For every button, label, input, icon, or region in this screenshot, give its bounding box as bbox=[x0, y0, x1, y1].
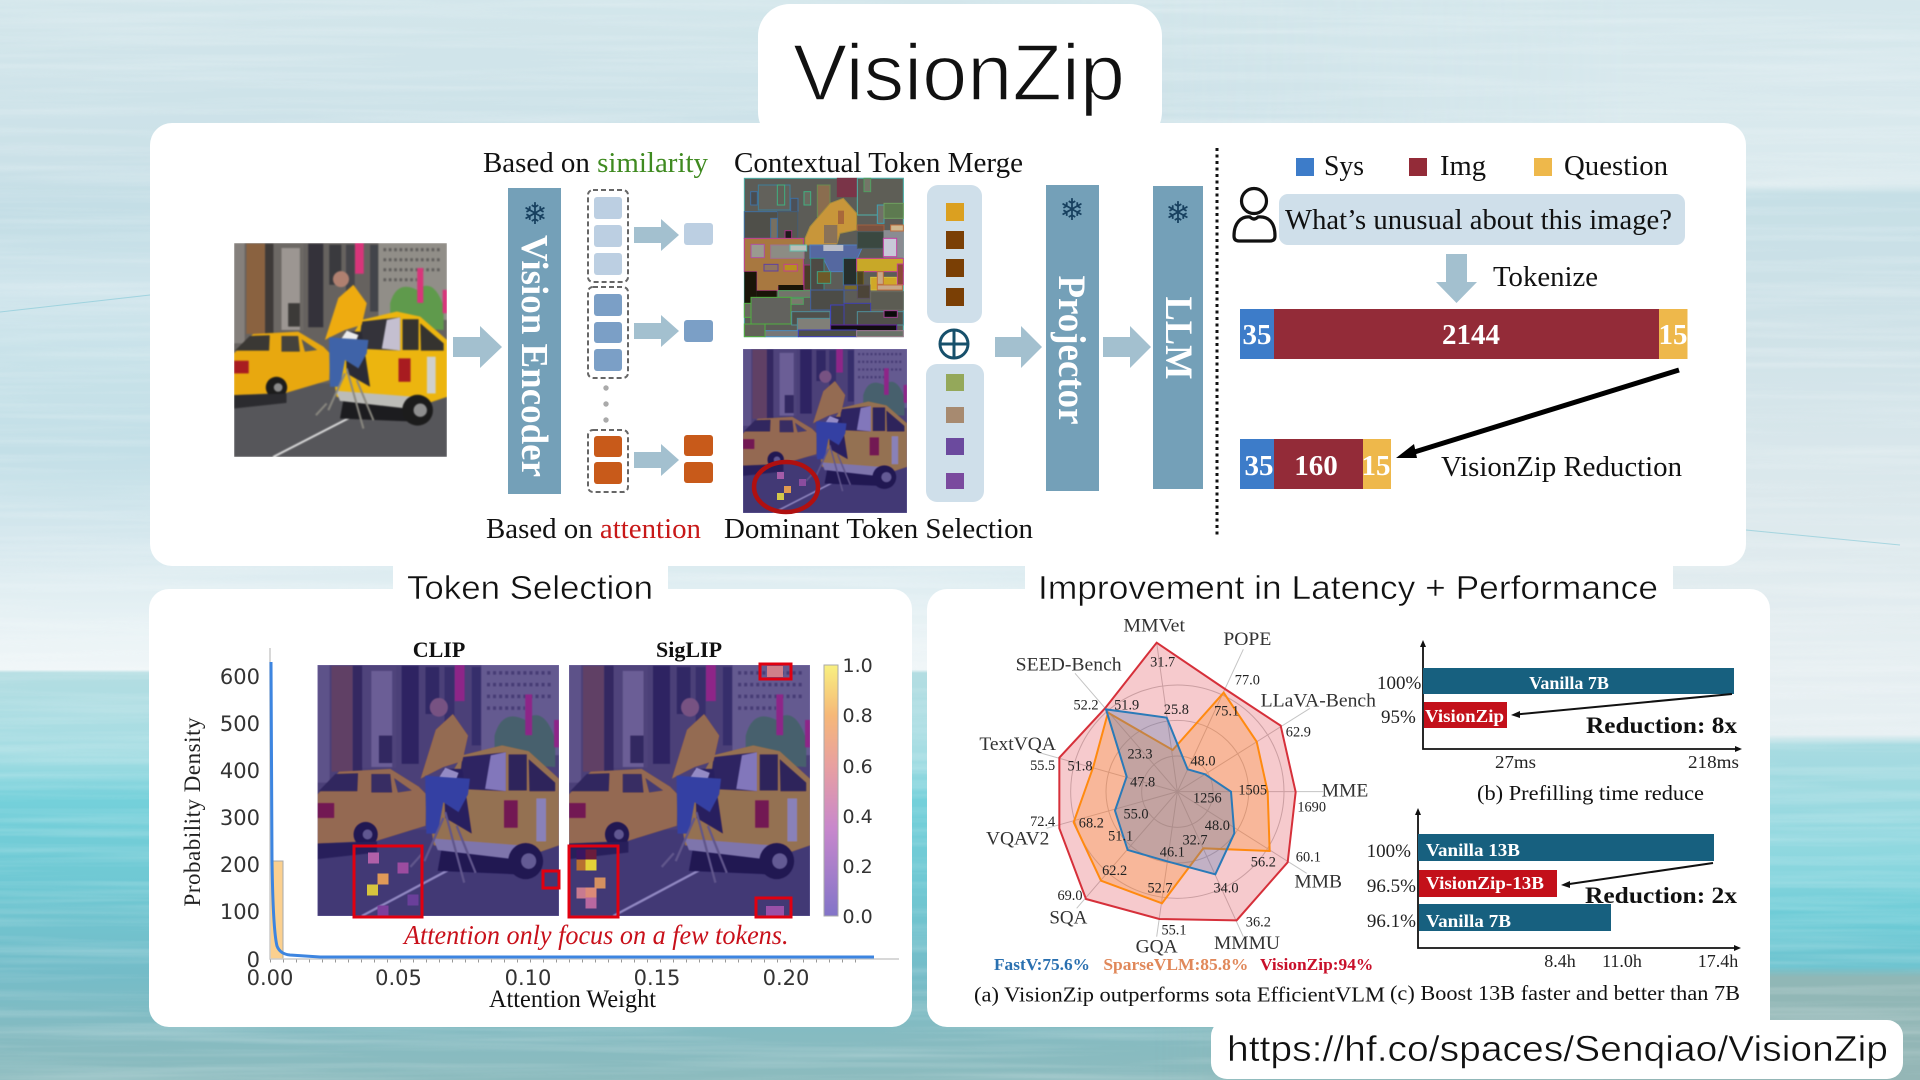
x axis ticks: 0.00 bbox=[247, 966, 293, 990]
radar series: FastV bbox=[1106, 709, 1234, 874]
colorbar: 0.0 bbox=[842, 906, 873, 928]
input photo: taxi and ironing man bbox=[234, 243, 447, 457]
x axis ticks: 0.10 bbox=[505, 966, 551, 990]
bar: vanilla 7B: Vanilla 7B bbox=[1529, 673, 1609, 693]
y labels c: 100% bbox=[1367, 841, 1411, 862]
bar: original token counts: 35 bbox=[1242, 319, 1272, 351]
panel: attention chart bbox=[180, 637, 899, 1013]
bar: reduced token counts: 35 bbox=[1244, 450, 1274, 482]
bar: vanilla 7B bbox=[1423, 668, 1734, 694]
arrow: projector to LLM bbox=[1103, 326, 1151, 368]
vision encoder block: Vision Encoder bbox=[513, 235, 555, 477]
label: SigLIP: SigLIP bbox=[656, 637, 722, 662]
colorbar: 1.0 bbox=[842, 655, 873, 677]
label: dominant token selection: Dominant Token Selection bbox=[724, 513, 1033, 545]
x axis ticks bbox=[247, 966, 809, 990]
bar: vanilla 7B lower bbox=[1419, 904, 1611, 931]
projector block bbox=[1046, 185, 1099, 491]
label: tokenize: Tokenize bbox=[1493, 262, 1598, 293]
radar legend: FastV:75.6% bbox=[994, 955, 1090, 974]
radar value labels: 62.2 bbox=[1102, 863, 1127, 879]
radar category labels: MMB bbox=[1294, 871, 1342, 892]
merged tokens bbox=[684, 223, 713, 483]
LLM block: LLM bbox=[1157, 296, 1200, 380]
radar value labels: 56.2 bbox=[1251, 855, 1276, 871]
y labels c: 96.5% bbox=[1367, 876, 1416, 897]
arrows: tokens to merged tokens bbox=[634, 219, 679, 476]
caption b: (b) Prefilling time reduce bbox=[1477, 781, 1704, 805]
radar value labels: 75.1 bbox=[1214, 704, 1239, 720]
radar category labels: GQA bbox=[1136, 936, 1178, 957]
x labels b bbox=[1495, 752, 1739, 772]
bar: reduced token counts bbox=[1240, 439, 1391, 489]
radar value labels: 47.8 bbox=[1130, 775, 1155, 791]
x labels c: 11.0h bbox=[1602, 951, 1642, 971]
label: based on similarity: Based on similarity bbox=[483, 147, 708, 179]
radar legend: VisionZip:94% bbox=[1260, 955, 1373, 974]
x axis ticks: 0.20 bbox=[763, 966, 809, 990]
y axis ticks: 400 bbox=[220, 759, 260, 783]
radar value labels: 55.5 bbox=[1030, 758, 1055, 774]
radar value labels bbox=[1030, 655, 1326, 938]
axis arrowheads b bbox=[1420, 640, 1742, 752]
x axis title: Attention Weight bbox=[489, 986, 656, 1013]
radar chart bbox=[974, 616, 1385, 1007]
colorbar: 0.2 bbox=[842, 856, 873, 878]
bar: original token counts: 2144 bbox=[1442, 319, 1500, 351]
axes b bbox=[1423, 644, 1738, 749]
icon: concatenate circle plus bbox=[940, 330, 968, 358]
x labels c: 8.4h bbox=[1544, 951, 1576, 971]
bar: vanilla 7B lower: Vanilla 7B bbox=[1426, 911, 1511, 931]
x labels b: 218ms bbox=[1688, 752, 1739, 772]
y axis ticks: 0 bbox=[247, 948, 260, 972]
panel: pipeline diagram bbox=[234, 147, 1203, 545]
superpixel merge image bbox=[744, 178, 903, 337]
bar: vanilla 13B bbox=[1418, 834, 1714, 861]
radar legend bbox=[994, 955, 1373, 974]
radar value labels: 1690 bbox=[1297, 800, 1326, 816]
radar value labels: 60.1 bbox=[1296, 850, 1321, 866]
radar value labels: 1256 bbox=[1193, 790, 1222, 806]
icon: user bbox=[1234, 188, 1275, 241]
arrow: tokenize down bbox=[1436, 254, 1477, 303]
radar value labels: 36.2 bbox=[1246, 915, 1271, 931]
legend: sys img question: Img bbox=[1440, 151, 1486, 182]
x labels c bbox=[1544, 951, 1738, 971]
heading: improvement: Improvement in Latency + Performance bbox=[1038, 569, 1658, 606]
callout: reduction 8x: Reduction: 8x bbox=[1586, 713, 1738, 738]
token groups by similarity and attention bbox=[588, 190, 628, 492]
radar series: VisionZip bbox=[1059, 643, 1296, 920]
chart c: training time bbox=[1367, 808, 1741, 1005]
radar category labels: SQA bbox=[1049, 907, 1087, 928]
radar category labels: MMMU bbox=[1214, 933, 1280, 954]
radar value labels: 62.9 bbox=[1286, 725, 1311, 741]
y labels b: 100% bbox=[1377, 673, 1422, 694]
vision encoder block bbox=[508, 188, 561, 494]
caption a: (a) VisionZip outperforms sota EfficientVLM bbox=[974, 983, 1385, 1007]
token pill: contextual bbox=[927, 185, 982, 323]
radar value labels: 51.8 bbox=[1067, 759, 1093, 775]
radar value labels: 51.1 bbox=[1108, 829, 1133, 845]
y axis title: Probability Density bbox=[180, 717, 205, 906]
radar value labels: 52.2 bbox=[1073, 697, 1099, 713]
bar: original token counts: 15 bbox=[1658, 319, 1688, 351]
arrow: tokens to projector bbox=[995, 326, 1042, 368]
bar: VisionZip: VisionZip bbox=[1425, 706, 1504, 726]
radar legend: SparseVLM:85.8% bbox=[1103, 955, 1248, 974]
LLM block bbox=[1153, 186, 1203, 489]
legend: sys img question bbox=[1296, 151, 1668, 182]
histogram bar bbox=[270, 861, 283, 959]
arrow: reduction bbox=[1396, 370, 1679, 458]
y labels c: 96.1% bbox=[1367, 911, 1416, 932]
radar value labels: 48.0 bbox=[1205, 818, 1230, 834]
radar value labels: 55.1 bbox=[1161, 922, 1187, 938]
radar grid bbox=[1038, 643, 1323, 937]
legend: sys img question: Question bbox=[1564, 151, 1668, 182]
label: visionzip reduction: VisionZip Reduction bbox=[1441, 452, 1682, 483]
y labels b: 95% bbox=[1381, 707, 1416, 728]
callout: attention note: Attention only focus on a few tokens. bbox=[402, 920, 788, 950]
y labels b bbox=[1377, 673, 1422, 728]
radar value labels: 25.8 bbox=[1164, 702, 1189, 718]
heatmap: CLIP bbox=[318, 665, 559, 917]
heatmap: SigLIP bbox=[569, 664, 810, 917]
radar value labels: 68.2 bbox=[1079, 815, 1104, 831]
bar: reduced token counts: 160 bbox=[1294, 450, 1338, 482]
radar category labels: POPE bbox=[1223, 629, 1271, 650]
radar category labels: LLaVA-Bench bbox=[1261, 691, 1376, 712]
radar value labels: 48.0 bbox=[1190, 754, 1216, 770]
projector block: ❄ bbox=[1059, 193, 1085, 228]
radar category labels: VQAV2 bbox=[986, 828, 1049, 849]
radar value labels: 1505 bbox=[1238, 782, 1267, 798]
panel: token reduction bbox=[1234, 151, 1688, 489]
radar category labels: MME bbox=[1322, 781, 1368, 802]
chart b: prefilling time bbox=[1377, 640, 1742, 805]
caption c: (c) Boost 13B faster and better than 7B bbox=[1390, 981, 1740, 1005]
radar value labels: 23.3 bbox=[1127, 746, 1153, 762]
callout: reduction 2x: Reduction: 2x bbox=[1585, 883, 1738, 908]
radar series: SparseVLM bbox=[1074, 693, 1270, 903]
radar value labels: 34.0 bbox=[1213, 881, 1239, 897]
colorbar: 0.4 bbox=[842, 806, 873, 828]
y axis ticks: 300 bbox=[220, 806, 260, 830]
URL badge: https://hf.co/spaces/Senqiao/VisionZip bbox=[1227, 1028, 1888, 1069]
y axis ticks: 100 bbox=[220, 900, 260, 924]
y axis ticks: 200 bbox=[220, 853, 260, 877]
x labels c: 17.4h bbox=[1698, 951, 1738, 971]
axis arrowheads c bbox=[1415, 808, 1741, 951]
heading: token selection: Token Selection bbox=[407, 569, 653, 606]
title: VisionZip bbox=[793, 28, 1125, 117]
bar: VisionZip-13B bbox=[1419, 870, 1557, 897]
radar value labels: 46.1 bbox=[1160, 845, 1185, 861]
bar: VisionZip-13B: VisionZip-13B bbox=[1426, 873, 1544, 893]
y axis ticks: 500 bbox=[220, 712, 260, 736]
arrow c bbox=[1561, 863, 1713, 888]
radar category labels bbox=[979, 616, 1376, 957]
colorbar: 0.8 bbox=[842, 705, 873, 727]
y axis ticks bbox=[220, 665, 260, 972]
chart axes bbox=[270, 648, 899, 961]
arrow: image to encoder bbox=[453, 326, 502, 368]
radar value labels: 51.9 bbox=[1114, 697, 1139, 713]
radar value labels: 69.0 bbox=[1057, 888, 1083, 904]
radar category labels: TextVQA bbox=[979, 734, 1056, 755]
radar category labels: SEED-Bench bbox=[1016, 655, 1122, 676]
y axis ticks: 600 bbox=[220, 665, 260, 689]
URL badge bbox=[1211, 1020, 1903, 1079]
radar value labels: 31.7 bbox=[1150, 655, 1175, 671]
x axis ticks: 0.05 bbox=[375, 966, 422, 990]
radar value labels: 72.4 bbox=[1030, 814, 1055, 830]
radar value labels: 32.7 bbox=[1182, 832, 1208, 848]
vision encoder block: ❄ bbox=[522, 197, 548, 232]
radar value labels: 77.0 bbox=[1235, 672, 1260, 688]
bar: reduced token counts: 15 bbox=[1362, 450, 1390, 482]
density curve bbox=[271, 662, 874, 957]
LLM block: ❄ bbox=[1165, 196, 1191, 231]
projector block: Projector bbox=[1050, 276, 1093, 424]
radar category labels: MMVet bbox=[1123, 616, 1186, 637]
label: CLIP: CLIP bbox=[413, 637, 465, 662]
bar: original token counts bbox=[1240, 309, 1688, 359]
bar: VisionZip bbox=[1424, 702, 1507, 728]
label: contextual token merge: Contextual Token Merge bbox=[734, 147, 1023, 179]
question bubble bbox=[1279, 194, 1685, 245]
colorbar: 0.6 bbox=[842, 756, 873, 778]
x labels b: 27ms bbox=[1495, 752, 1536, 772]
y labels c bbox=[1367, 841, 1416, 932]
attention overlay image bbox=[743, 349, 907, 513]
label: based on attention: Based on attention bbox=[486, 513, 701, 545]
bar: vanilla 13B: Vanilla 13B bbox=[1426, 840, 1520, 860]
colorbar bbox=[824, 655, 873, 928]
legend: sys img question: Sys bbox=[1324, 151, 1364, 182]
arrow b bbox=[1511, 694, 1732, 718]
x axis ticks: 0.15 bbox=[634, 966, 680, 990]
radar value labels: 52.7 bbox=[1147, 881, 1173, 897]
radar value labels: 55.0 bbox=[1123, 806, 1149, 822]
question bubble: What’s unusual about this image? bbox=[1285, 205, 1672, 236]
token pill: dominant bbox=[926, 364, 984, 502]
axes c bbox=[1418, 812, 1737, 948]
